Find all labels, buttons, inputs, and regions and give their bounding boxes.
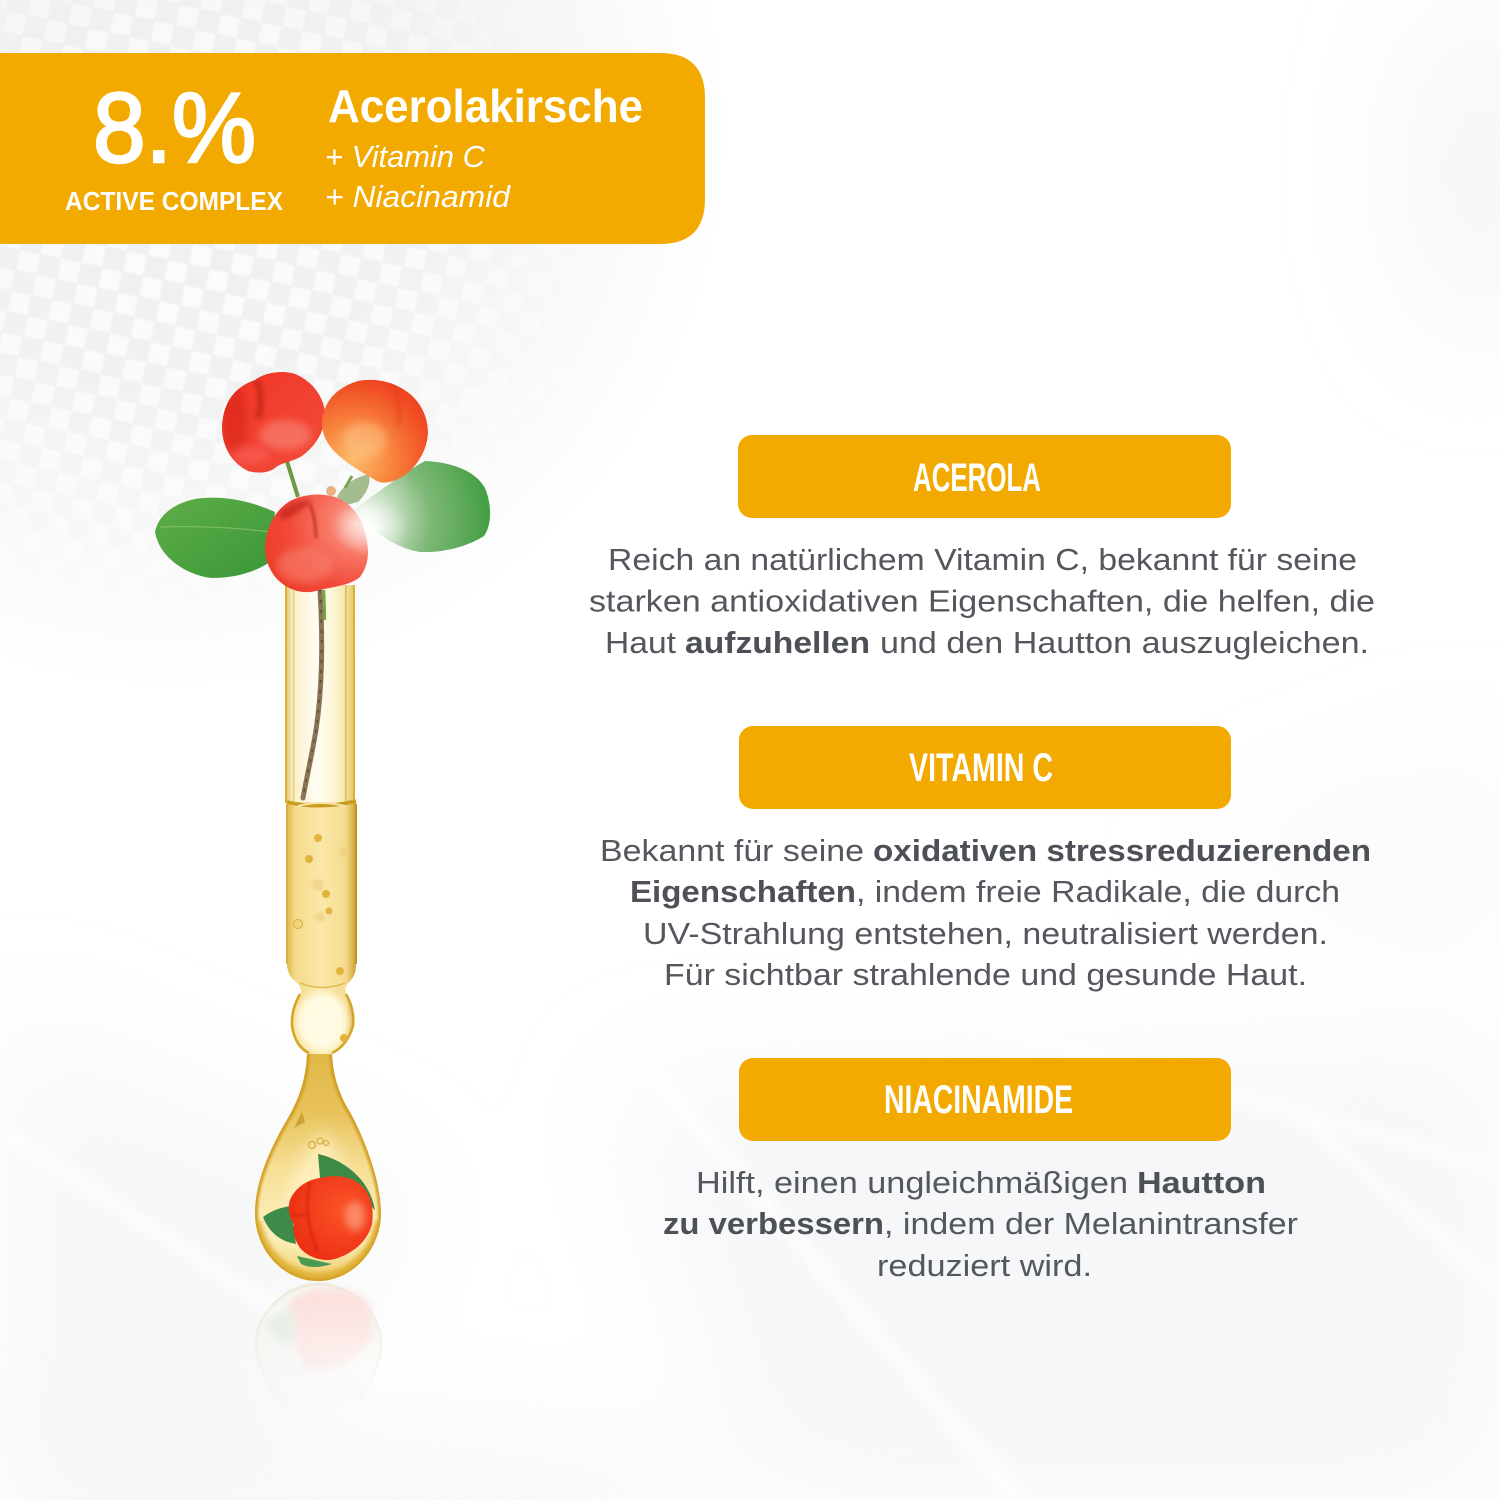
cherry top left xyxy=(222,372,325,473)
text: vitamin c xyxy=(600,833,1371,992)
active complex label: ACTIVE COMPLEX xyxy=(65,186,284,216)
illustration: dropper with acerola cherries xyxy=(155,372,490,1450)
heading: vitamin c: VITAMIN C xyxy=(909,746,1053,790)
left leaf xyxy=(155,498,275,578)
text: vitamin c: oxidativen stressreduzierenden xyxy=(873,833,1371,868)
cherry centre xyxy=(265,494,368,592)
text: acerola: Haut xyxy=(605,625,676,660)
heading: vitamin c xyxy=(739,726,1231,809)
text: niacinamide: reduziert wird. xyxy=(877,1248,1092,1283)
text: vitamin c: UV-Strahlung entstehen, neutralisiert werden. xyxy=(643,916,1328,951)
stems and bud xyxy=(286,458,370,505)
text: acerola: aufzuhellen xyxy=(685,625,870,660)
cherry top right xyxy=(322,380,428,483)
section: acerola xyxy=(589,435,1375,660)
ingredient line: niacinamid: + Niacinamid xyxy=(325,179,512,214)
text: acerola: Reich an natürlichem Vitamin C, bekannt für seine xyxy=(608,542,1357,577)
text: niacinamide: zu verbessern xyxy=(663,1206,884,1241)
reflection of drop xyxy=(254,1282,382,1383)
text: vitamin c: Bekannt für seine xyxy=(600,833,864,868)
top banner xyxy=(0,53,705,244)
light flare xyxy=(334,498,410,558)
text: vitamin c: Für sichtbar strahlende und gesunde Haut. xyxy=(664,957,1307,992)
text: niacinamide: Hautton xyxy=(1137,1165,1266,1200)
section: niacinamide xyxy=(663,1058,1298,1283)
banner title: Acerolakirsche xyxy=(328,80,643,132)
heading: acerola xyxy=(738,435,1231,518)
ingredient line: vitamin c: + Vitamin C xyxy=(325,139,486,174)
glass tube upper xyxy=(285,585,355,803)
percentage figure: 8.% xyxy=(93,72,256,183)
text: acerola: starken antioxidativen Eigenschaften, die helfen, die xyxy=(589,584,1375,618)
text: acerola xyxy=(589,542,1375,660)
heading: acerola: ACEROLA xyxy=(913,456,1041,500)
drop leaves xyxy=(318,1154,375,1210)
text: niacinamide xyxy=(663,1165,1298,1283)
stem xyxy=(303,590,325,798)
liquid column and bulb xyxy=(287,801,356,1054)
oil drop xyxy=(255,1054,381,1281)
text: vitamin c: Eigenschaften xyxy=(630,874,856,909)
text: niacinamide: , indem der Melanintransfer xyxy=(884,1206,1298,1241)
bubbles xyxy=(294,834,349,1042)
text: vitamin c: , indem freie Radikale, die durch xyxy=(856,874,1340,909)
heading: niacinamide: NIACINAMIDE xyxy=(884,1078,1073,1122)
right leaf xyxy=(353,461,490,552)
text: acerola: und den Hautton auszugleichen. xyxy=(880,625,1369,660)
text: niacinamide: Hilft, einen ungleichmäßigen xyxy=(696,1165,1128,1200)
section: vitamin c xyxy=(600,726,1371,992)
heading: niacinamide xyxy=(739,1058,1231,1141)
drop cherry xyxy=(289,1176,373,1260)
